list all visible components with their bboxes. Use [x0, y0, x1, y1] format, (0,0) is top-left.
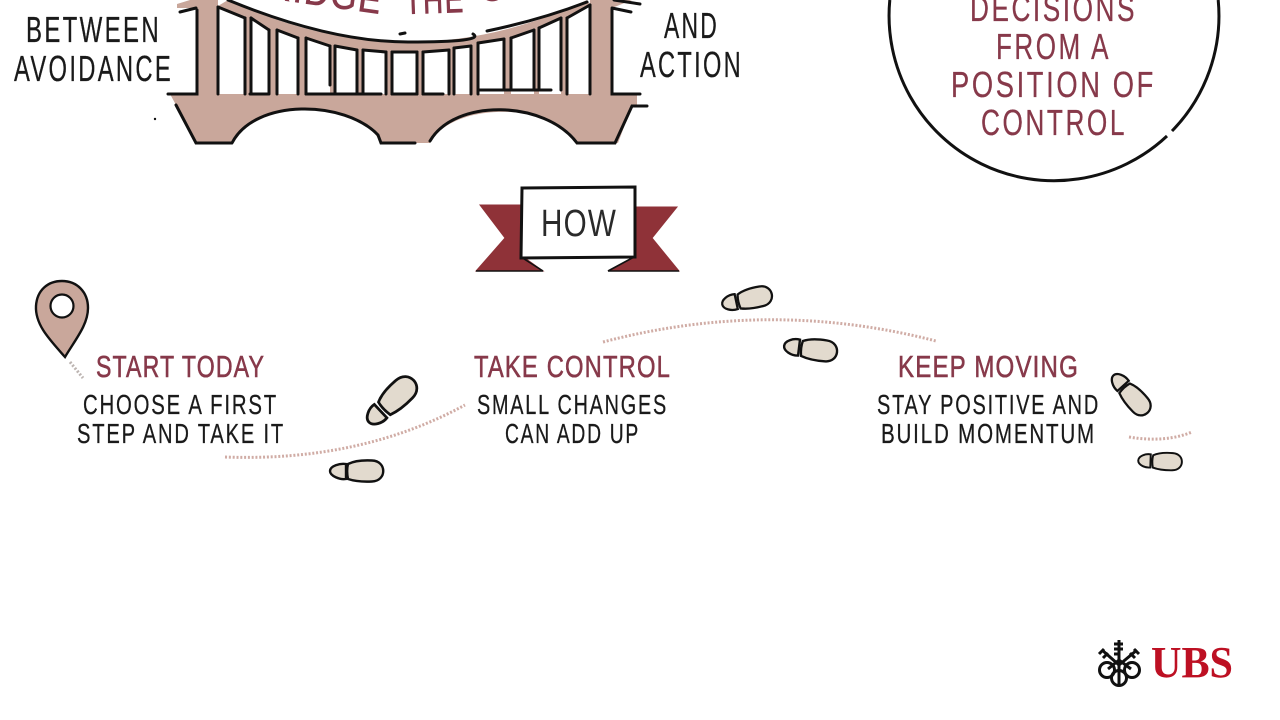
- icon: footprint 6: [1138, 452, 1182, 471]
- step: keep moving: KEEP MOVING: [898, 349, 1079, 384]
- step: start today: CHOOSE A FIRST: [83, 389, 278, 420]
- icon: map pin: [36, 281, 88, 357]
- step: start today: START TODAY: [96, 349, 265, 384]
- left label: between avoidance: [14, 9, 173, 89]
- bridge ink lines: [168, 0, 647, 143]
- UBS wordmark: UBS: [1151, 638, 1233, 687]
- bridge body: [170, 0, 637, 143]
- dotted path: onward: [1129, 432, 1192, 439]
- dotted path: start: [70, 362, 83, 378]
- step: take control: [474, 349, 671, 449]
- curved title: bridge the gap: [241, 0, 565, 23]
- left label: between avoidance: AVOIDANCE: [14, 48, 173, 89]
- icon: three crossed keys: [1099, 640, 1140, 686]
- step: keep moving: STAY POSITIVE AND: [877, 389, 1100, 420]
- right label: and action: AND: [664, 5, 719, 46]
- circle callout: decisions from a position of control: [889, 0, 1219, 181]
- left label: between avoidance: BETWEEN: [26, 9, 161, 50]
- step: take control: CAN ADD UP: [505, 418, 640, 449]
- left ribbon tail: [476, 205, 543, 271]
- icon: footprint 3: [720, 284, 774, 314]
- bridge illustration: [154, 0, 647, 143]
- right label: and action: ACTION: [640, 44, 743, 85]
- step: take control: TAKE CONTROL: [474, 349, 671, 384]
- right ribbon tail: [608, 207, 679, 271]
- right label: and action: [640, 5, 743, 85]
- bridge panels: [218, 5, 590, 94]
- step: take control: SMALL CHANGES: [477, 389, 668, 420]
- step: start today: [77, 349, 285, 449]
- banner plate: [521, 187, 635, 258]
- dotted path: start to control: [225, 405, 465, 457]
- icon: footprint 1: [361, 371, 422, 431]
- circle callout: decisions from a position of control: FROM A: [996, 26, 1111, 67]
- icon: footprint 4: [783, 335, 838, 363]
- icon: footprint 2: [330, 460, 383, 482]
- UBS logo: [1099, 638, 1233, 687]
- step: start today: STEP AND TAKE IT: [77, 418, 285, 449]
- icon: footprint 5: [1106, 369, 1155, 420]
- circle callout: decisions from a position of control: CONTROL: [981, 102, 1127, 143]
- how ribbon banner: [476, 187, 679, 271]
- step: keep moving: BUILD MOMENTUM: [881, 418, 1096, 449]
- circle callout: decisions from a position of control: POSITION OF: [951, 64, 1156, 105]
- dotted path: control to moving: [603, 320, 936, 342]
- step: keep moving: [877, 349, 1100, 449]
- banner label: HOW: [541, 203, 617, 245]
